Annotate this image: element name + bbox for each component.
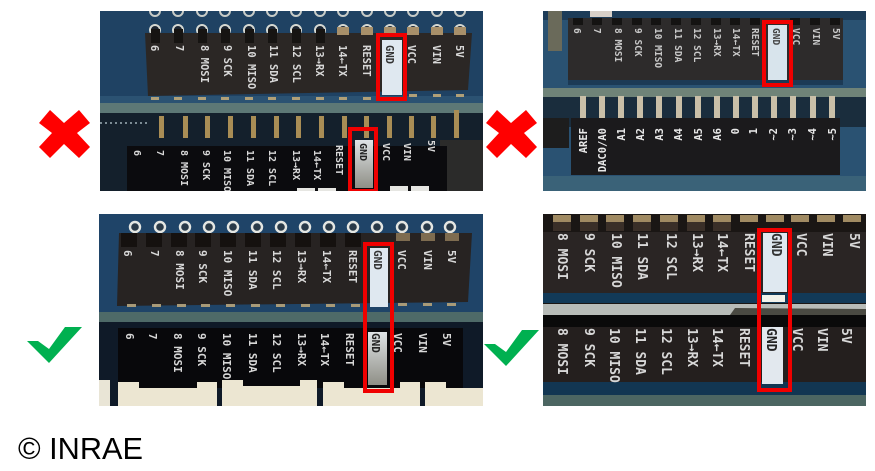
lower pin labels <box>578 128 839 172</box>
lower header pin labels: 9 SCK <box>195 333 208 366</box>
upper header pin labels: 9 SCK <box>221 45 233 77</box>
mirrored upper pin labels: 5V <box>830 28 841 40</box>
icon: green check, bottom left <box>27 327 82 363</box>
upper header pin labels: 12 SCL <box>270 250 283 290</box>
upper header pin labels: 10 MISO <box>245 45 257 89</box>
highlighted GND pin label, upper <box>763 233 787 292</box>
mirrored upper pin labels: 13→RX <box>711 28 722 57</box>
upper header pin labels: 11 SDA <box>267 45 279 84</box>
upper header pin labels: 12 SCL <box>663 233 678 280</box>
lower header pin labels: 13→RX <box>290 150 301 180</box>
panel: incorrect stacking, top left <box>100 6 483 192</box>
red outline: aligned GND <box>365 244 392 391</box>
upper header pin labels: 13→RX <box>295 250 308 283</box>
lower header pin labels: VIN <box>401 143 412 161</box>
lower pin labels: 1 <box>748 128 760 134</box>
upper header pin labels: VIN <box>430 45 442 64</box>
upper header pin labels: 5V <box>445 250 458 264</box>
lower header pin labels: VCC <box>380 143 391 161</box>
lower header pin labels: 6 <box>131 150 142 156</box>
upper header pin labels <box>121 250 458 297</box>
upper header pin labels: 8 MOSI <box>198 45 210 83</box>
lower pin labels: A1 <box>616 128 628 141</box>
lower header pin labels: VCC <box>391 333 404 353</box>
upper header pin labels: 8 MOSI <box>554 233 569 280</box>
lower pin labels: ~2 <box>768 128 780 141</box>
lower pin labels: A4 <box>673 128 685 141</box>
lower header pin labels: 12 SCL <box>270 333 283 373</box>
upper header pin labels: 8 MOSI <box>173 250 186 290</box>
icon: red cross, top left <box>39 110 90 158</box>
lower header pin labels: 9 SCK <box>200 150 211 180</box>
upper header pin labels: VIN <box>819 233 834 257</box>
icon: red cross, top right <box>486 110 537 158</box>
lower header pin labels: 5V <box>838 328 853 344</box>
lower header block <box>571 118 840 175</box>
upper header pin labels: 14←TX <box>320 250 333 283</box>
lower header pin labels: GND <box>763 328 778 352</box>
lower header pin labels: RESET <box>333 145 344 175</box>
upper header block <box>568 18 843 85</box>
lower pin labels: ~4 <box>807 128 819 141</box>
upper header pin labels: 14←TX <box>336 45 348 77</box>
highlighted GND pin label, upper <box>382 40 402 95</box>
upper header pin labels: VCC <box>395 250 408 270</box>
upper header pin labels: 10 MISO <box>221 250 234 297</box>
mirrored upper pin labels: RESET <box>749 28 760 57</box>
lower header pin labels: 9 SCK <box>581 328 596 367</box>
red outline: lower GND <box>350 129 376 191</box>
lower header pin labels: 13→RX <box>295 333 308 366</box>
lower header pin labels: 10 MISO <box>606 328 621 383</box>
mirrored upper pin labels: VIN <box>810 28 821 45</box>
lower header pin labels <box>123 333 453 380</box>
mirrored upper pin labels: 8 MOSI <box>612 28 623 62</box>
lower header pin labels: 8 MOSI <box>178 150 189 186</box>
upper header pin labels: 13→RX <box>689 233 704 272</box>
upper header pin labels: GND <box>371 250 384 270</box>
upper header pin labels: 9 SCK <box>581 233 596 272</box>
highlighted GND pin label, upper <box>370 248 388 307</box>
lower header pin labels: 7 <box>146 333 159 340</box>
red outline: aligned GND <box>759 230 790 390</box>
upper header pin labels: GND <box>768 233 783 257</box>
upper header pin labels: RESET <box>741 233 756 272</box>
mirrored upper pin labels: 6 <box>571 28 582 34</box>
lower header pin labels: VCC <box>789 328 804 351</box>
copyright text: © INRAE <box>18 431 143 466</box>
lower header pin labels: 5V <box>440 333 453 347</box>
upper header pin labels: 11 SDA <box>634 233 649 280</box>
upper header pin labels: VCC <box>793 233 808 256</box>
mirrored upper pin labels: GND <box>770 28 781 45</box>
lower pin labels: A2 <box>635 128 647 141</box>
lower header pin labels <box>131 140 436 192</box>
mirrored upper pin labels: 12 SCL <box>691 28 702 63</box>
upper header pin labels: GND <box>383 45 395 64</box>
lower header pin labels: 10 MISO <box>221 150 232 192</box>
upper header pin labels: RESET <box>346 250 359 283</box>
lower pin labels: DAC0/A0 <box>597 128 609 172</box>
lower header pin labels: 14←TX <box>318 333 331 366</box>
lower header pin labels: RESET <box>736 328 751 367</box>
upper header pin labels: 12 SCL <box>290 45 302 83</box>
highlighted GND pin label, upper <box>768 25 787 80</box>
lower pin labels: ~3 <box>787 128 799 141</box>
mirrored upper pin labels <box>571 28 841 68</box>
upper header pin labels: VCC <box>405 45 417 64</box>
lower header pin labels: 11 SDA <box>244 150 255 186</box>
lower header pin labels: GND <box>369 333 382 353</box>
lower pin labels: ~5 <box>827 128 839 141</box>
lower pin labels: 0 <box>730 128 742 134</box>
lower header pin labels: GND <box>357 143 368 161</box>
lower pin labels: A6 <box>712 128 724 141</box>
upper header pin labels: 10 MISO <box>608 233 623 288</box>
upper header pin labels: 7 <box>173 45 185 51</box>
lower header pin labels: RESET <box>343 333 356 366</box>
upper header pin labels: VIN <box>421 250 434 270</box>
lower pin labels: A5 <box>693 128 705 141</box>
mirrored upper pin labels: VCC <box>790 28 801 45</box>
lower header pin labels: VIN <box>416 333 429 353</box>
lower header pin labels: 14←TX <box>311 150 322 180</box>
lower header pin labels: 6 <box>123 333 136 340</box>
upper header pin labels <box>148 45 465 89</box>
upper header pin labels: 7 <box>148 250 161 257</box>
upper header pin labels: 14←TX <box>714 233 729 272</box>
lower header block <box>543 327 866 382</box>
upper header pin labels: 13→RX <box>313 45 325 77</box>
mirrored upper pin labels: 14←TX <box>730 28 741 57</box>
upper header block <box>543 232 866 293</box>
mirrored upper pin labels: 7 <box>591 28 602 34</box>
upper header pin labels: 6 <box>121 250 134 257</box>
upper header pin labels: 5V <box>453 45 465 58</box>
lower header pin labels: 12 SCL <box>658 328 673 375</box>
icon: green check, bottom right <box>484 330 539 366</box>
upper header pin labels <box>554 233 861 288</box>
panel: correct stacking, bottom right <box>543 214 866 406</box>
lower header pin labels <box>554 328 853 383</box>
red outline: upper GND <box>378 35 405 99</box>
red outline: GND <box>764 22 791 85</box>
upper header block <box>117 233 472 306</box>
mirrored upper pin labels: 11 SDA <box>672 28 683 63</box>
lower header pin labels: 12 SCL <box>266 150 277 186</box>
lower header pin labels: 14←TX <box>709 328 724 367</box>
lower header pin labels: 11 SDA <box>632 328 647 375</box>
upper header pin labels: 5V <box>846 233 861 249</box>
lower pin labels: A3 <box>654 128 666 141</box>
lower pin labels: AREF <box>578 128 590 153</box>
upper header pin labels: 11 SDA <box>246 250 259 290</box>
upper header block <box>145 33 472 96</box>
lower header pin labels: 13→RX <box>684 328 699 367</box>
lower header block <box>127 146 447 191</box>
panel: incorrect stacking, top right <box>543 11 866 191</box>
lower header block <box>118 328 463 388</box>
lower header pin labels: 7 <box>154 150 165 156</box>
mirrored upper pin labels: 10 MISO <box>652 28 663 68</box>
lower header pin labels: 5V <box>425 140 436 152</box>
lower header pin labels: 11 SDA <box>246 333 259 373</box>
upper header pin labels: RESET <box>360 45 372 77</box>
upper header pin labels: 6 <box>148 45 160 51</box>
lower header pin labels: VIN <box>814 328 829 352</box>
upper header pin labels: 9 SCK <box>196 250 209 283</box>
lower header pin labels: 8 MOSI <box>171 333 184 373</box>
lower header pin labels: 8 MOSI <box>554 328 569 375</box>
mirrored upper pin labels: 9 SCK <box>632 28 643 57</box>
white connectors <box>99 380 483 406</box>
lower header pin labels: 10 MISO <box>220 333 233 380</box>
panel: correct stacking, bottom left <box>99 214 483 406</box>
